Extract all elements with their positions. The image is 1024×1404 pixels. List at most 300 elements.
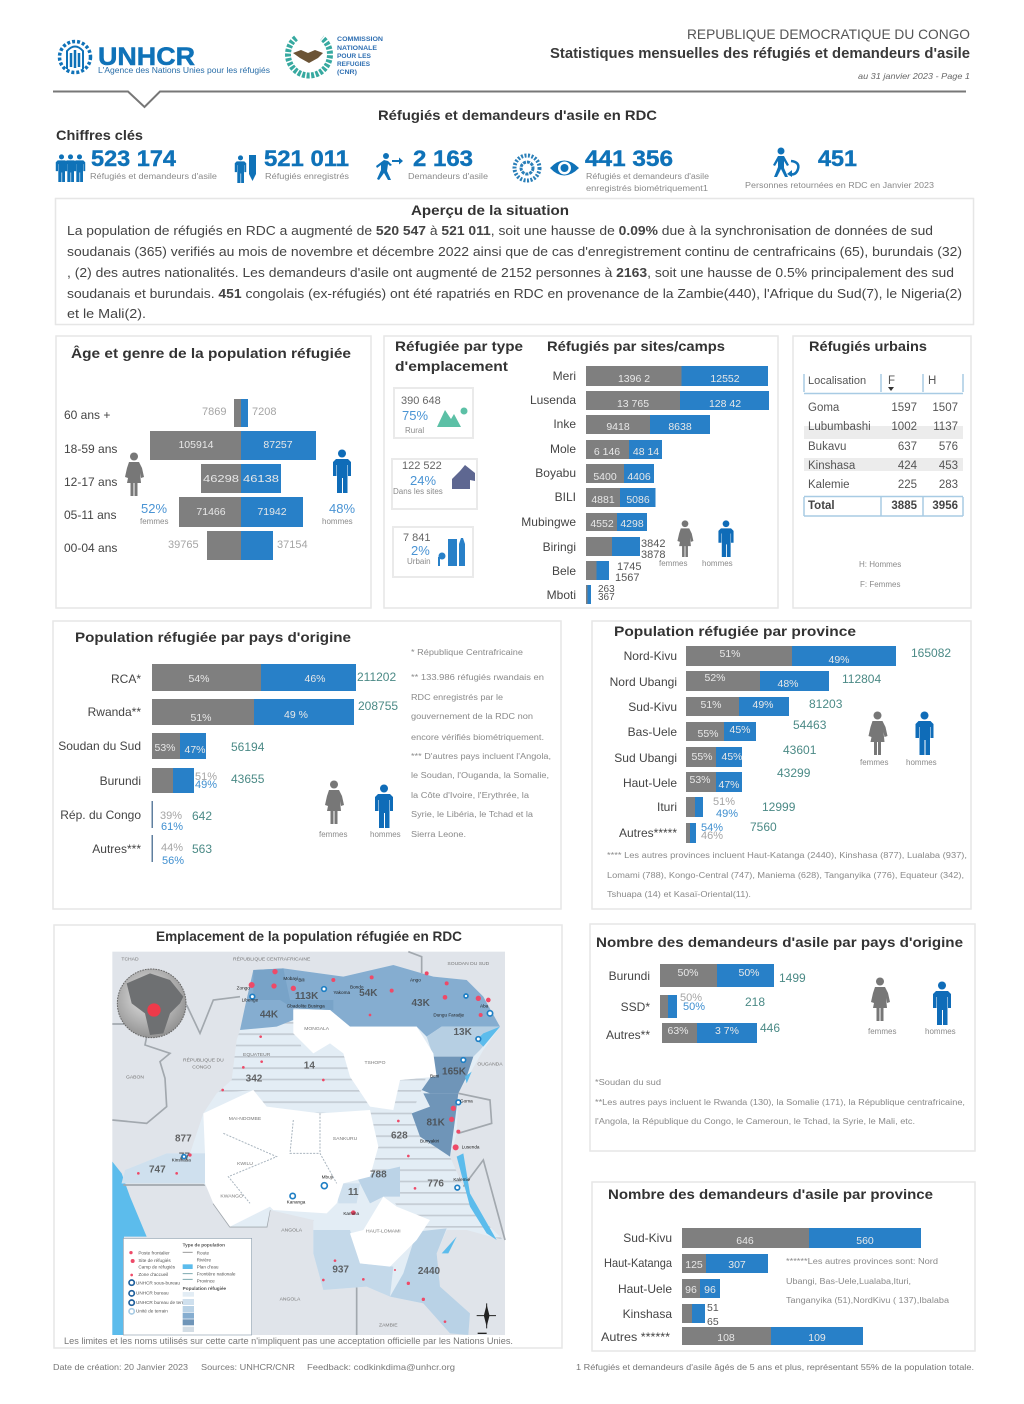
pyramid chart: 71466 (196, 506, 226, 518)
figure: returnees: 451 (818, 146, 857, 171)
map place names: KWANGO (220, 1193, 243, 1199)
main title: Statistiques mensuelles des réfugiés et demandeurs d'asile (550, 45, 970, 62)
key figures heading: Chiffres clés (56, 127, 143, 143)
CNR name: COMMISSION (337, 36, 383, 43)
camps bar chart: Inke (553, 417, 576, 431)
camps bar chart: 5086 (626, 494, 650, 506)
legend box: Route (197, 1250, 210, 1255)
card: sites: 24% (410, 473, 436, 488)
origin bar chart: 46% (304, 673, 326, 685)
province legend (860, 712, 937, 767)
asylum origin bar chart: 3 7% (715, 1025, 739, 1037)
footnote: 1 Réfugiés et demandeurs d'asile âgés de 5 ans et plus, représentant 55% de la population totale. (576, 1362, 974, 1372)
refugee figures on map: 43K (411, 998, 431, 1009)
origin notes: Syrie, le Libéria, le Tchad et la (411, 810, 534, 819)
province notes: Tshuapa (14) et Kasaï-Oriental(11). (607, 890, 751, 899)
camps bar chart: 3842 (641, 538, 665, 550)
camps bar chart: 6 146 (594, 446, 620, 458)
urban table: 637 (898, 441, 917, 453)
site name labels: Kamina (343, 1211, 360, 1216)
site name labels: Bondo (350, 984, 364, 989)
site name labels: Lusenda (462, 1144, 480, 1149)
province bar chart: Bas-Uele (628, 725, 677, 739)
map place names: MONGALA (304, 1026, 330, 1032)
asylum province bar chart: Autres ****** (601, 1330, 670, 1344)
card: sites: 122 522 (402, 460, 442, 472)
camps bar chart: 128 42 (709, 398, 741, 410)
men share: 48% (329, 501, 355, 516)
panel: age and gender (56, 336, 371, 608)
refugee figures on map: 877 (175, 1134, 192, 1145)
camps bar chart: 4552 (590, 518, 614, 530)
asylum origin notes: **Les autres pays incluent le Rwanda (130), la Somalie (171), la République centrafricaine, (595, 1098, 965, 1107)
province bar chart: 165082 (911, 646, 951, 660)
asylum origin bar chart: 446 (760, 1021, 780, 1035)
map place names: TSHOPO (364, 1060, 386, 1066)
asylum province bar chart: 307 (728, 1259, 746, 1271)
origin legend (319, 780, 401, 839)
origin notes (411, 648, 551, 839)
figure: asylum seekers: 2 163 (413, 146, 473, 171)
figure: refugees and asylum seekers: 523 174 (91, 146, 177, 171)
urban table: Goma (808, 402, 840, 414)
pyramid chart: 60 ans + (64, 408, 110, 422)
card: rural: 390 648 (401, 395, 441, 407)
figure: registered refugees (235, 146, 349, 183)
province bar chart: 48% (777, 678, 799, 690)
site name labels: Bili (298, 978, 305, 983)
site name labels: Beni (430, 1073, 439, 1078)
camps bar chart (521, 366, 769, 604)
camps bar chart: 48 14 (633, 446, 659, 458)
province bar chart: 55% (691, 751, 713, 763)
province bar chart: 54463 (793, 718, 827, 732)
refugee figures on map: 13K (453, 1027, 473, 1038)
origin bar chart: 61% (161, 821, 183, 833)
asylum province bar chart: 96 (685, 1284, 697, 1296)
north arrow (477, 1303, 496, 1333)
refugee figures on map: 937 (332, 1265, 349, 1276)
panel: asylum seekers by province (592, 1182, 975, 1351)
camps bar chart: 5400 (593, 471, 617, 483)
asylum province notes: Ubangi, Bas-Uele,Lualaba,Ituri, (786, 1277, 911, 1286)
refugee figures on map: 342 (246, 1074, 263, 1085)
asylum origin bar chart: SSD* (621, 1000, 650, 1014)
legend box: Type de population (183, 1243, 225, 1248)
urban table: Lubumbashi (808, 421, 871, 433)
refugee figures on map: 77 (179, 1151, 190, 1162)
origin bar chart: 56194 (231, 740, 265, 754)
figure: refugees and asylum seekers (56, 146, 218, 182)
asylum origin bar chart: 1499 (779, 971, 806, 985)
feedback: Feedback: codkinkdima@unhcr.org (307, 1362, 455, 1372)
refugee figures on map: 54K (359, 988, 378, 999)
province bar chart: 81203 (809, 697, 843, 711)
map place names: RÉPUBLIQUE DU (183, 1057, 224, 1064)
map place names: EQUATEUR (243, 1052, 271, 1058)
site name labels: Ango (410, 978, 421, 983)
urban table: 424 (898, 460, 918, 472)
asylum origin bar chart: 50% (680, 992, 702, 1004)
legend box: Camp de réfugiés (138, 1264, 176, 1269)
pyramid chart: 7869 (202, 406, 226, 418)
legend box: UNHCR bureau (136, 1291, 169, 1296)
asylum province bar chart: 109 (808, 1332, 826, 1344)
card: urban (393, 527, 473, 577)
province bar chart: Nord Ubangi (610, 675, 677, 689)
origin notes: la Côte d'Ivoire, l'Erythrée, la (411, 791, 530, 800)
panel: location map (54, 925, 562, 1348)
figure: biometric registered: Réfugiés et demandeurs d'asile (586, 172, 710, 181)
urban table: 1507 (932, 402, 958, 414)
overview text: La population de réfugiés en RDC a augmenté de 520 547 à 521 011, soit une hausse de 0.09% due à la synchronisation de données de sud (67, 223, 933, 238)
origin notes: Sierra Leone. (411, 830, 466, 839)
women share (125, 452, 168, 526)
card: urban: Urbain (407, 557, 431, 566)
origin bar chart: RCA* (111, 672, 141, 686)
map place names: HAUT-LOMAMI (366, 1228, 401, 1234)
camps bar chart: 9418 (606, 421, 630, 433)
asylum province notes: Tanganyika (51),NordKivu ( 137),Ibalaba (786, 1296, 950, 1305)
type heading: d'emplacement (395, 358, 508, 374)
pyramid chart: 18-59 ans (64, 442, 117, 456)
asylum origin bar chart: 50% (677, 967, 699, 979)
camps bar chart: 12552 (710, 373, 740, 385)
asylum province bar chart: Kinshasa (623, 1307, 672, 1321)
origin bar chart: Rwanda** (88, 705, 141, 719)
site name labels: Mobayi (283, 976, 298, 981)
UNHCR tagline: L'Agence des Nations Unies pour les réfugiés (98, 66, 270, 75)
figure: returnees: Personnes retournées en RDC en Janvier 2023 (745, 181, 935, 190)
CNR name: POUR LES (337, 53, 372, 60)
origin bar chart: Burundi (100, 774, 141, 788)
pyramid chart: 46138 (243, 473, 279, 485)
map place names: MAI-NDOMBE (229, 1116, 262, 1122)
country title: REPUBLIQUE DEMOCRATIQUE DU CONGO (687, 26, 970, 42)
urban table: 3885 (891, 500, 918, 512)
origin bar chart: 208755 (358, 699, 398, 713)
camps bar chart: 1567 (615, 572, 639, 584)
pyramid chart: 00-04 ans (64, 541, 117, 555)
camps bar chart: 8638 (668, 421, 692, 433)
urban table (804, 374, 963, 516)
figure: refugees and asylum seekers: Réfugiés et demandeurs d'asile (90, 172, 218, 181)
panel: urban refugees (793, 336, 971, 608)
card: urban: 7 841 (403, 532, 431, 544)
origin legend: hommes (370, 830, 401, 839)
camps bar chart: Bele (552, 564, 576, 578)
pyramid chart: 39765 (168, 539, 199, 551)
origin notes: ** 133.986 réfugiés rwandais en (411, 673, 544, 682)
urban table: Kinshasa (808, 460, 856, 472)
province bar chart: 12999 (762, 800, 796, 814)
asylum province bar chart: Sud-Kivu (623, 1231, 672, 1245)
province heading: Population réfugiée par province (614, 623, 856, 639)
origin bar chart: 47% (184, 744, 206, 756)
type heading: Réfugiée par type (395, 338, 523, 354)
camps bar chart: 13 765 (617, 398, 649, 410)
legend box: Rivière (197, 1258, 212, 1263)
province bar chart: 49% (716, 808, 738, 820)
refugee site markers (137, 969, 491, 1323)
urban table: F (888, 375, 895, 387)
refugee figures on map: 11 (348, 1187, 359, 1198)
site name labels: Dungu Faradje (433, 1013, 465, 1018)
origin notes: * République Centrafricaine (411, 648, 524, 657)
camps bar chart: Mboti (547, 588, 576, 602)
urban table: 283 (939, 479, 958, 491)
creation date: Date de création: 20 Janvier 2023 (53, 1362, 188, 1372)
province bar chart: 49% (828, 654, 850, 666)
origin bar chart: 49% (195, 779, 217, 791)
figure: biometric registered (514, 146, 710, 193)
globe inset (117, 969, 186, 1038)
refugee figures on map: 165K (442, 1066, 467, 1077)
asylum province bar chart: 96 (704, 1284, 716, 1296)
CNR name: (CNR) (337, 69, 357, 76)
UNHCR office markers (182, 987, 493, 1199)
camps bar chart: Mole (550, 442, 576, 456)
province legend: femmes (860, 758, 888, 767)
origin bar chart: 51% (195, 771, 217, 783)
date: au 31 janvier 2023 - Page 1 (858, 71, 970, 81)
asylum province bar chart: 51 (707, 1302, 719, 1314)
province bar chart: 49% (752, 699, 774, 711)
camps bar chart: 4406 (627, 471, 651, 483)
header: document titles (550, 26, 970, 81)
camps legend: hommes (702, 559, 733, 568)
camps bar chart: BILI (555, 490, 576, 504)
province bar chart: 55% (697, 728, 719, 740)
overview heading: Aperçu de la situation (411, 202, 569, 218)
origin bar chart: 39% (160, 810, 182, 822)
asylum origin legend (868, 978, 956, 1036)
asylum origin bar chart (606, 964, 806, 1043)
table legend: H: Hommes (859, 560, 901, 569)
sources: Sources: UNHCR/CNR (201, 1362, 295, 1372)
asylum origin heading: Nombre des demandeurs d'asile par pays d'origine (596, 934, 963, 950)
urban table: Localisation (808, 375, 866, 387)
origin bar chart: Soudan du Sud (58, 739, 141, 753)
province legend: hommes (906, 758, 937, 767)
camps bar chart: Biringi (543, 540, 576, 554)
header rule with chevron (53, 92, 966, 107)
table legend (859, 560, 901, 589)
origin bar chart: 51% (190, 712, 212, 724)
map place names (121, 956, 503, 1329)
header: CNR logo (288, 36, 383, 76)
urban table: 453 (939, 460, 958, 472)
legend box: Population réfugiée (183, 1286, 227, 1291)
card: urban: 2% (411, 543, 430, 558)
legend box: Poste frontalier (138, 1250, 170, 1255)
map place names: SOUDAN DU SUD (447, 961, 490, 967)
site name labels: Kananga (287, 1199, 306, 1204)
overview text: soudanais et burundais. 451 congolais (ex-réfugiés) ont été rapatriés en RDC en provenance de la Zambie(440), l'Afrique du Sud(7), le Nigeria(2) (67, 286, 962, 301)
legend box: Plan d'eau (197, 1264, 219, 1269)
legend box: Province (197, 1278, 215, 1283)
camps bar chart: 263 (598, 584, 615, 595)
urban table: 3956 (932, 500, 958, 512)
province bar chart: 45% (721, 751, 743, 763)
origin bar chart: Autres*** (92, 842, 141, 856)
panel: population by country of origin (53, 621, 561, 909)
icon: UNHCR emblem (60, 42, 90, 72)
asylum origin bar chart: 50% (683, 1001, 705, 1013)
map place names: TCHAD (121, 957, 139, 963)
map place names: OUGANDA (477, 1062, 503, 1068)
map disclaimer: Les limites et les noms utilisés sur cette carte n'impliquent pas une acceptation officielle par les Nations Unies. (64, 1336, 513, 1346)
site name labels (172, 976, 489, 1216)
legend box: UNHCR sous-bureau (136, 1280, 180, 1285)
province bar chart: 7560 (750, 820, 777, 834)
origin notes: RDC enregistrés par le (411, 693, 504, 702)
asylum origin notes: l'Angola, la République du Congo, le Cameroun, le Tchad, la Syrie, le Mali, etc. (595, 1117, 915, 1126)
card: rural: 75% (402, 408, 428, 423)
site name labels: Aba (480, 1003, 489, 1008)
footer (53, 1362, 974, 1372)
origin bar chart (58, 664, 398, 867)
origin bar chart: 54% (188, 673, 210, 685)
asylum province bar chart: Haut-Uele (618, 1282, 672, 1296)
asylum origin bar chart: Burundi (609, 969, 650, 983)
camps bar chart: Mubingwe (521, 515, 576, 529)
refugee figures on map: 776 (427, 1179, 444, 1190)
camps heading: Réfugiés par sites/camps (547, 338, 725, 354)
figure: returnees (745, 146, 935, 190)
site name labels: Kalemie (453, 1177, 471, 1182)
asylum province bar chart: 65 (707, 1316, 719, 1328)
map place names: CONGO (192, 1064, 211, 1070)
province bar chart: Sud Ubangi (614, 751, 677, 765)
asylum origin legend: hommes (925, 1027, 956, 1036)
urban table: 1137 (933, 421, 958, 433)
panel: type and camps (384, 336, 778, 608)
figure: asylum seekers (376, 146, 489, 181)
camps bar chart: Meri (553, 369, 576, 383)
map place names: RÉPUBLIQUE CENTRAFRICAINE (233, 956, 311, 963)
UNHCR wordmark: UNHCR (98, 43, 195, 71)
legend box: Frontière nationale (197, 1272, 236, 1277)
site name labels: Mbuji (322, 1174, 333, 1179)
origin heading: Population réfugiée par pays d'origine (75, 629, 351, 645)
figure: biometric registered: enregistrés biométriquement1 (586, 184, 709, 193)
women share: 52% (141, 501, 167, 516)
province bar chart: 47% (718, 779, 740, 791)
asylum origin bar chart: Autres** (606, 1028, 650, 1042)
key figures (56, 127, 935, 193)
men share (322, 450, 355, 526)
refugee figures on map: 14 (304, 1061, 315, 1072)
urban heading: Réfugiés urbains (809, 338, 927, 354)
urban table: 1002 (891, 421, 917, 433)
origin bar chart: 43655 (231, 772, 265, 786)
asylum origin legend: femmes (868, 1027, 896, 1036)
map place names: ZAMBIE (379, 1323, 398, 1329)
overview text: et le Mali(2). (67, 306, 146, 321)
province notes: **** Les autres provinces incluent Haut-Katanga (2440), Kinshasa (877), Lualaba (937), (607, 851, 967, 860)
province bar chart: 46% (701, 830, 723, 842)
origin notes: le Soudan, l'Ouganda, la Somalie, (411, 771, 549, 780)
card: rural (394, 388, 473, 438)
camps bar chart: 1396 2 (618, 373, 650, 385)
type heading (395, 338, 523, 374)
overview text: soudanais (365) verifiés au mois de novembre et décembre 2022 ainsi que de cas d'enregistrement continu de centrafricains (65), burundais (32) (67, 244, 962, 259)
map heading: Emplacement de la population réfugiée en RDC (156, 928, 462, 944)
camps bar chart: 367 (598, 592, 615, 603)
asylum province bar chart: 108 (717, 1332, 735, 1344)
table legend: F: Femmes (860, 580, 900, 589)
camps bar chart: 4298 (620, 518, 644, 530)
legend box: Site de réfugiés (138, 1258, 171, 1263)
card: sites: Dans les sites (393, 487, 443, 496)
province notes (607, 851, 967, 899)
urban table: Total (808, 500, 835, 512)
urban table: 1597 (891, 402, 917, 414)
site name labels: Kinshasa (172, 1158, 191, 1163)
province bar chart: Nord-Kivu (624, 649, 677, 663)
province bar chart: Ituri (657, 800, 677, 814)
legend box: Zone d'accueil (138, 1272, 168, 1277)
overview text (67, 223, 962, 321)
panel: asylum seekers by origin (590, 924, 975, 1151)
panel: population by province (592, 621, 971, 909)
figure: registered refugees: 521 011 (264, 146, 349, 171)
CNR name: REFUGIES (337, 61, 371, 68)
section heading: Réfugiés et demandeurs d'asile en RDC (378, 107, 657, 123)
pyramid chart: 7208 (252, 406, 276, 418)
pyramid chart: 105914 (178, 439, 214, 451)
map place names: ANGOLA (280, 1297, 301, 1303)
card: rural: Rural (405, 426, 424, 435)
urban table: Kalemie (808, 479, 850, 491)
province bar chart: 43299 (777, 766, 811, 780)
origin bar chart: 56% (162, 855, 184, 867)
asylum origin notes (595, 1078, 965, 1126)
CNR name (337, 36, 383, 76)
map place names: SANKURU (333, 1136, 358, 1142)
origin bar chart: 53% (154, 742, 176, 754)
province bar chart: 52% (704, 672, 726, 684)
province bar chart: 53% (689, 774, 711, 786)
origin bar chart: 211202 (357, 670, 396, 684)
camps bar chart: Boyabu (535, 466, 576, 480)
refugee figures on map (149, 988, 473, 1277)
legend box: Unité de terrain (136, 1308, 168, 1313)
camps bar chart: 4881 (591, 494, 615, 506)
asylum province heading: Nombre des demandeurs d'asile par province (608, 1186, 933, 1202)
origin bar chart: 642 (192, 809, 212, 823)
asylum province notes (786, 1257, 950, 1305)
refugee figures on map: 2440 (418, 1266, 441, 1277)
urban table: H (928, 375, 936, 387)
map (112, 952, 505, 1335)
province bar chart (610, 646, 951, 843)
pyramid chart: 37154 (277, 539, 308, 551)
asylum province notes: ******Les autres provinces sont: Nord (786, 1257, 938, 1266)
province bar chart: 54% (701, 822, 723, 834)
refugee figures on map: 628 (391, 1130, 408, 1141)
pyramid chart: 46298 (203, 473, 239, 485)
site name labels: Zongo (237, 985, 250, 990)
province bar chart: 51% (713, 796, 735, 808)
overview text: , (2) des autres nationalités. Les demandeurs d'asile ont augmenté de 2152 personnes à 2163, soit une hausse de 0.5% principalement des sud (67, 265, 954, 280)
origin legend: femmes (319, 830, 347, 839)
site name labels: Bunyakiri (420, 1139, 439, 1144)
figure: asylum seekers: Demandeurs d'asile (408, 172, 489, 181)
map place names: KWILU (237, 1161, 253, 1167)
urban table: 225 (898, 479, 917, 491)
